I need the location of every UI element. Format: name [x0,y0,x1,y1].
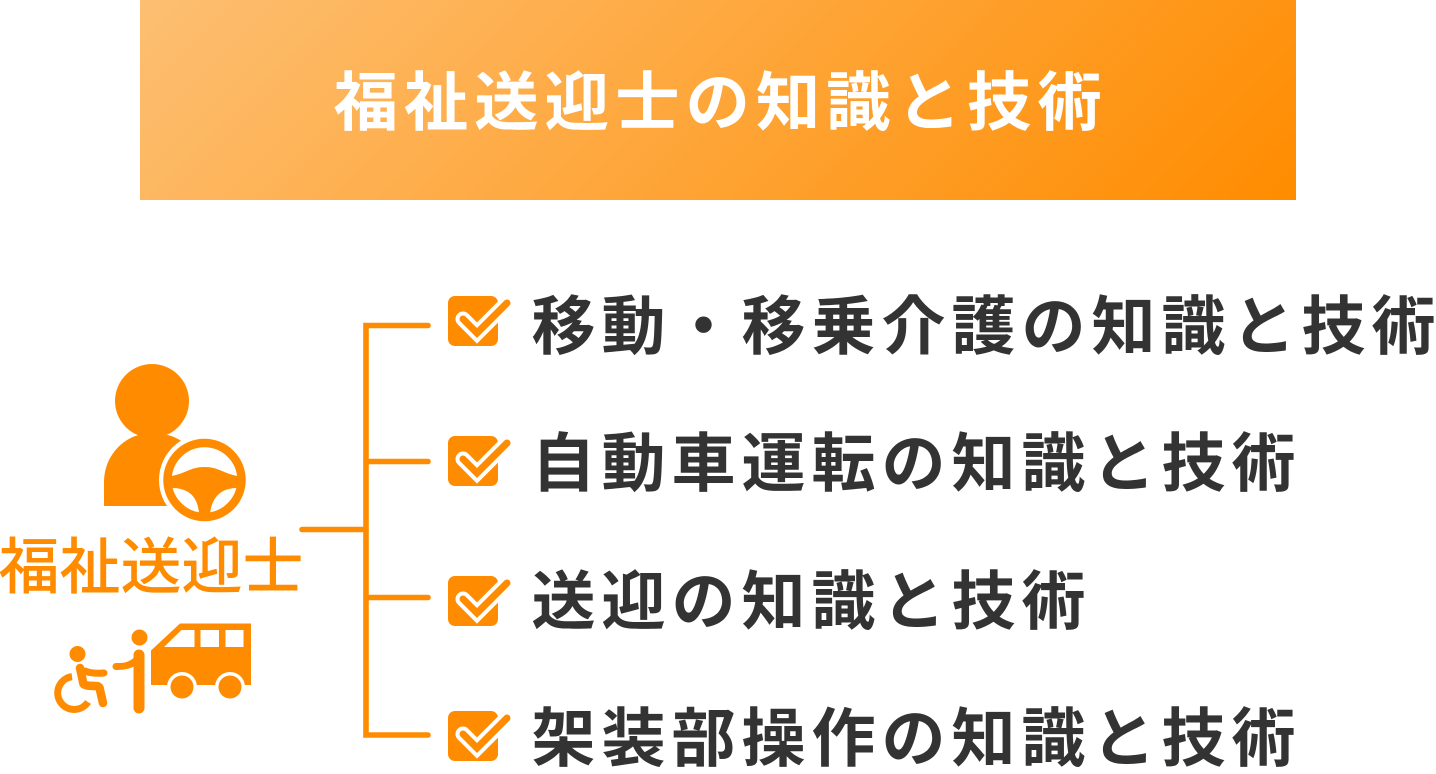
icon: check 1 [448,296,507,346]
connector tree [302,326,428,735]
item: equipment operation: 架装部操作の知識と技術 [532,703,1302,774]
role label: 福祉送迎士 [0,533,304,601]
title banner [140,0,1296,200]
icon: check 2 [448,436,507,486]
item: transfer care: 移動・移乗介護の知識と技術 [532,291,1436,363]
icon: check 3 [448,576,507,626]
item: driving: 自動車運転の知識と技術 [532,428,1302,500]
icon: driver with steering wheel [104,364,251,526]
title: 福祉送迎士の知識と技術 [334,67,1108,139]
item: transport: 送迎の知識と技術 [532,566,1092,638]
icon: wheelchair user, attendant and van [58,624,252,709]
icon: check 4 [448,711,507,761]
